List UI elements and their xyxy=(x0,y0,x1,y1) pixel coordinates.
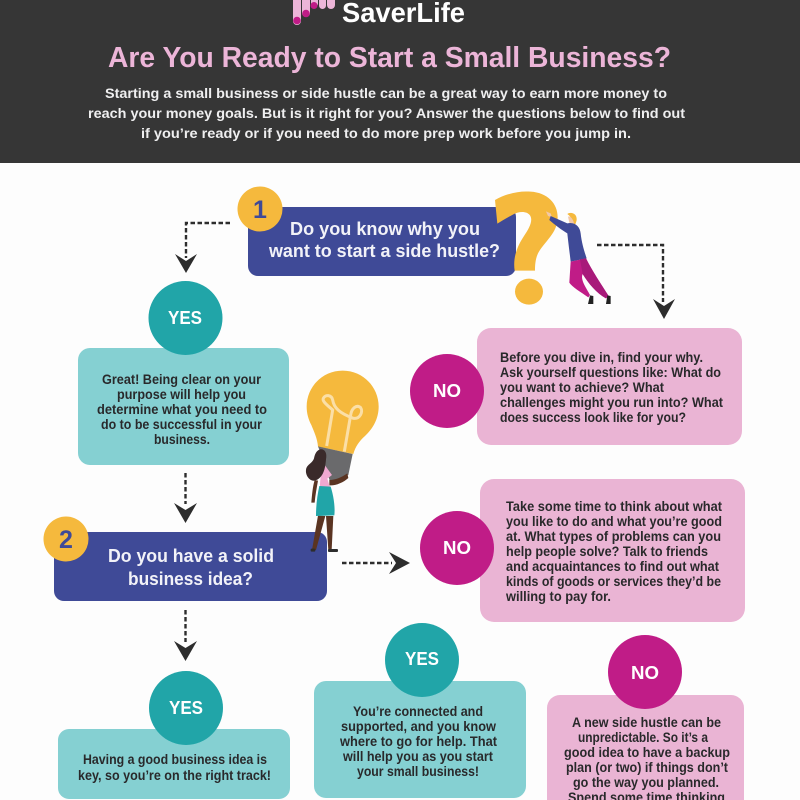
panel: yes answer 3: YES xyxy=(405,649,439,669)
panel: no answer 2: help people solve? Talk to friends xyxy=(506,544,708,559)
panel: no answer 1: you want to achieve? What xyxy=(500,380,664,395)
question 1 box xyxy=(248,207,516,276)
panel: yes answer 2 xyxy=(58,671,290,799)
panel: no answer 1: Before you dive in, find your why. xyxy=(500,350,703,365)
panel: no answer 1: NO xyxy=(433,381,461,401)
panel: no answer 1: does success look like for you? xyxy=(500,410,686,425)
title: Are You Ready to Start a Small Business? xyxy=(108,42,671,74)
icon: lightbulb with woman xyxy=(306,371,379,552)
arrow: question 1 to no xyxy=(597,245,675,319)
panel: no answer 2: kinds of goods or services they’d be xyxy=(506,574,721,589)
arrow: question 2 to yes xyxy=(174,610,197,661)
panel: yes answer 1: do to be successful in your xyxy=(101,417,263,432)
question 2 box xyxy=(54,532,327,601)
intro text: if you’re ready or if you need to do more prep work before you jump in. xyxy=(141,125,631,141)
panel: yes answer 3: You’re connected and xyxy=(353,704,483,719)
panel: no answer 1: challenges might you run into? What xyxy=(500,395,723,410)
arrow: question 1 to yes xyxy=(175,223,230,273)
panel: no answer 3: plan (or two) if things don’t xyxy=(566,760,728,775)
panel: yes answer 1: Great! Being clear on your xyxy=(102,372,262,387)
panel: no answer 2: at. What types of problems can you xyxy=(506,529,721,544)
panel: yes answer 1: purpose will help you xyxy=(117,387,246,402)
panel: yes answer 3 xyxy=(314,623,526,798)
panel: yes answer 2: key, so you’re on the right track! xyxy=(78,768,271,783)
panel: no answer 2: you like to do and what you’re good xyxy=(506,514,722,529)
panel: yes answer 3: your small business! xyxy=(357,764,479,779)
intro text: reach your money goals. But is it right for you? Answer the questions below to find out xyxy=(88,105,685,121)
panel: no answer 1 xyxy=(410,328,742,445)
badge 2: 2 xyxy=(59,526,73,554)
panel: yes answer 2: YES xyxy=(169,698,203,718)
panel: yes answer 3: supported, and you know xyxy=(341,719,496,734)
arrow: yes to question 2 xyxy=(174,473,197,523)
icon: question mark with man pushing xyxy=(495,191,611,305)
panel: yes answer 1: business. xyxy=(154,432,210,447)
panel: yes answer 3: will help you as you start xyxy=(342,749,493,764)
intro text: Starting a small business or side hustle can be a great way to earn more money to xyxy=(105,85,667,101)
question 1 box: want to start a side hustle? xyxy=(268,240,500,261)
panel: no answer 1: Ask yourself questions like: What do xyxy=(500,365,721,380)
panel: no answer 3: go the way you planned. xyxy=(573,775,719,790)
panel: no answer 3: NO xyxy=(631,663,659,683)
panel: no answer 3 xyxy=(547,635,744,800)
question 2 box: Do you have a solid xyxy=(108,545,274,566)
intro text xyxy=(88,85,685,141)
badge 1 xyxy=(238,186,282,232)
header band xyxy=(0,0,800,163)
panel: yes answer 1: YES xyxy=(168,308,202,328)
panel: yes answer 3: where to go for help. That xyxy=(339,734,497,749)
arrow: question 2 to no xyxy=(342,552,410,574)
question 1 box: Do you know why you xyxy=(290,218,480,239)
panel: no answer 3: A new side hustle can be xyxy=(572,715,721,730)
panel: no answer 2: willing to pay for. xyxy=(505,589,611,604)
panel: no answer 2: and acquaintances to find out what xyxy=(506,559,719,574)
badge 2 xyxy=(44,516,88,562)
panel: yes answer 1 xyxy=(78,281,289,465)
badge 1: 1 xyxy=(253,196,267,224)
panel: no answer 3: good idea to have a backup xyxy=(564,745,730,760)
panel: no answer 2: Take some time to think about what xyxy=(506,499,722,514)
panel: no answer 3: unpredictable. So it’s a xyxy=(578,730,708,745)
question 2 box: business idea? xyxy=(128,568,253,589)
panel: no answer 2 xyxy=(420,479,745,622)
panel: yes answer 1: determine what you need to xyxy=(97,402,267,417)
panel: yes answer 2: Having a good business idea is xyxy=(83,752,267,767)
panel: no answer 2: NO xyxy=(443,538,471,558)
